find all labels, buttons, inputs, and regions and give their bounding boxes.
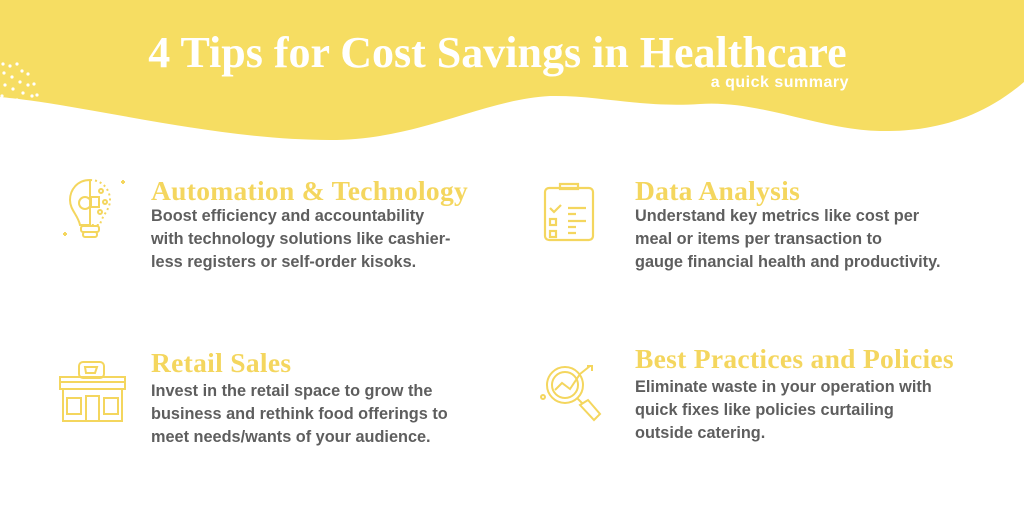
body text: Eliminate waste in your operation with <box>635 378 932 396</box>
icon: magnifier <box>540 365 602 422</box>
subtitle: a quick summary <box>711 74 849 91</box>
title: 4 Tips for Cost Savings in Healthcare <box>148 28 847 77</box>
panel: data analysis <box>544 175 940 271</box>
body text <box>151 382 448 446</box>
body text: Understand key metrics like cost per <box>635 207 919 225</box>
body text: quick fixes like policies curtailing <box>635 401 894 419</box>
body text <box>151 207 450 271</box>
heading: Data Analysis <box>635 175 800 206</box>
body text <box>635 207 940 271</box>
body text: gauge financial health and productivity. <box>635 253 940 271</box>
body text: with technology solutions like cashier- <box>151 230 450 248</box>
heading: Retail Sales <box>151 347 291 378</box>
panel: retail <box>59 347 448 446</box>
icon: lightbulb <box>63 179 125 238</box>
body text: meal or items per transaction to <box>635 230 882 248</box>
body text: Boost efficiency and accountability <box>151 207 424 225</box>
panel: best practices <box>540 343 954 442</box>
panel: automation <box>63 175 468 271</box>
body text: business and rethink food offerings to <box>151 405 448 423</box>
heading: Automation & Technology <box>151 175 468 206</box>
header wave background <box>0 0 1024 140</box>
heading: Best Practices and Policies <box>635 343 954 374</box>
icon: clipboard <box>544 182 594 242</box>
body text: less registers or self-order kisoks. <box>151 253 416 271</box>
icon: store <box>59 361 126 422</box>
body text: meet needs/wants of your audience. <box>151 428 431 446</box>
body text: outside catering. <box>635 424 765 442</box>
body text: Invest in the retail space to grow the <box>151 382 432 400</box>
body text <box>635 378 932 442</box>
